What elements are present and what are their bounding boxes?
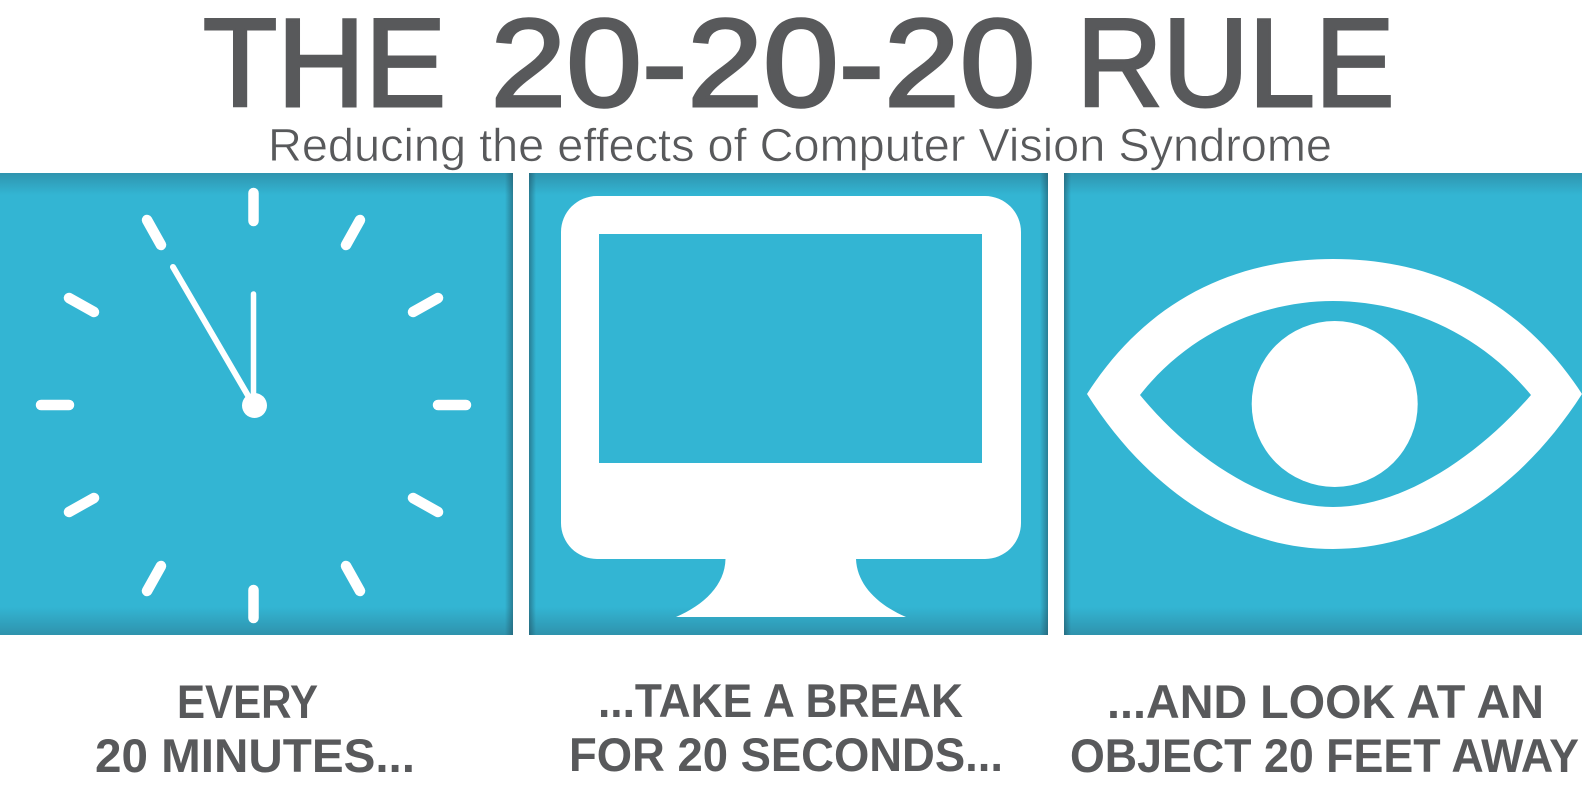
caption: every 20 minutes: EVERY: [177, 676, 318, 729]
icon: clock: [36, 188, 472, 624]
caption: every 20 minutes: 20 MINUTES...: [95, 730, 415, 783]
caption: take a break: [569, 675, 1003, 782]
icon: eye: [1087, 259, 1582, 549]
caption: take a break: FOR 20 SECONDS...: [569, 729, 1003, 782]
caption: look at an object: [1070, 676, 1579, 783]
panel: clock: [0, 173, 513, 635]
subtitle: Reducing the effects of Computer Vision Syndrome: [268, 119, 1332, 171]
caption: look at an object: ...AND LOOK AT AN: [1107, 676, 1544, 729]
panel: eye: [1064, 173, 1582, 635]
caption: every 20 minutes: [95, 676, 415, 783]
caption: take a break: ...TAKE A BREAK: [598, 675, 963, 728]
panel: monitor: [529, 173, 1048, 635]
icon: monitor: [561, 196, 1021, 617]
